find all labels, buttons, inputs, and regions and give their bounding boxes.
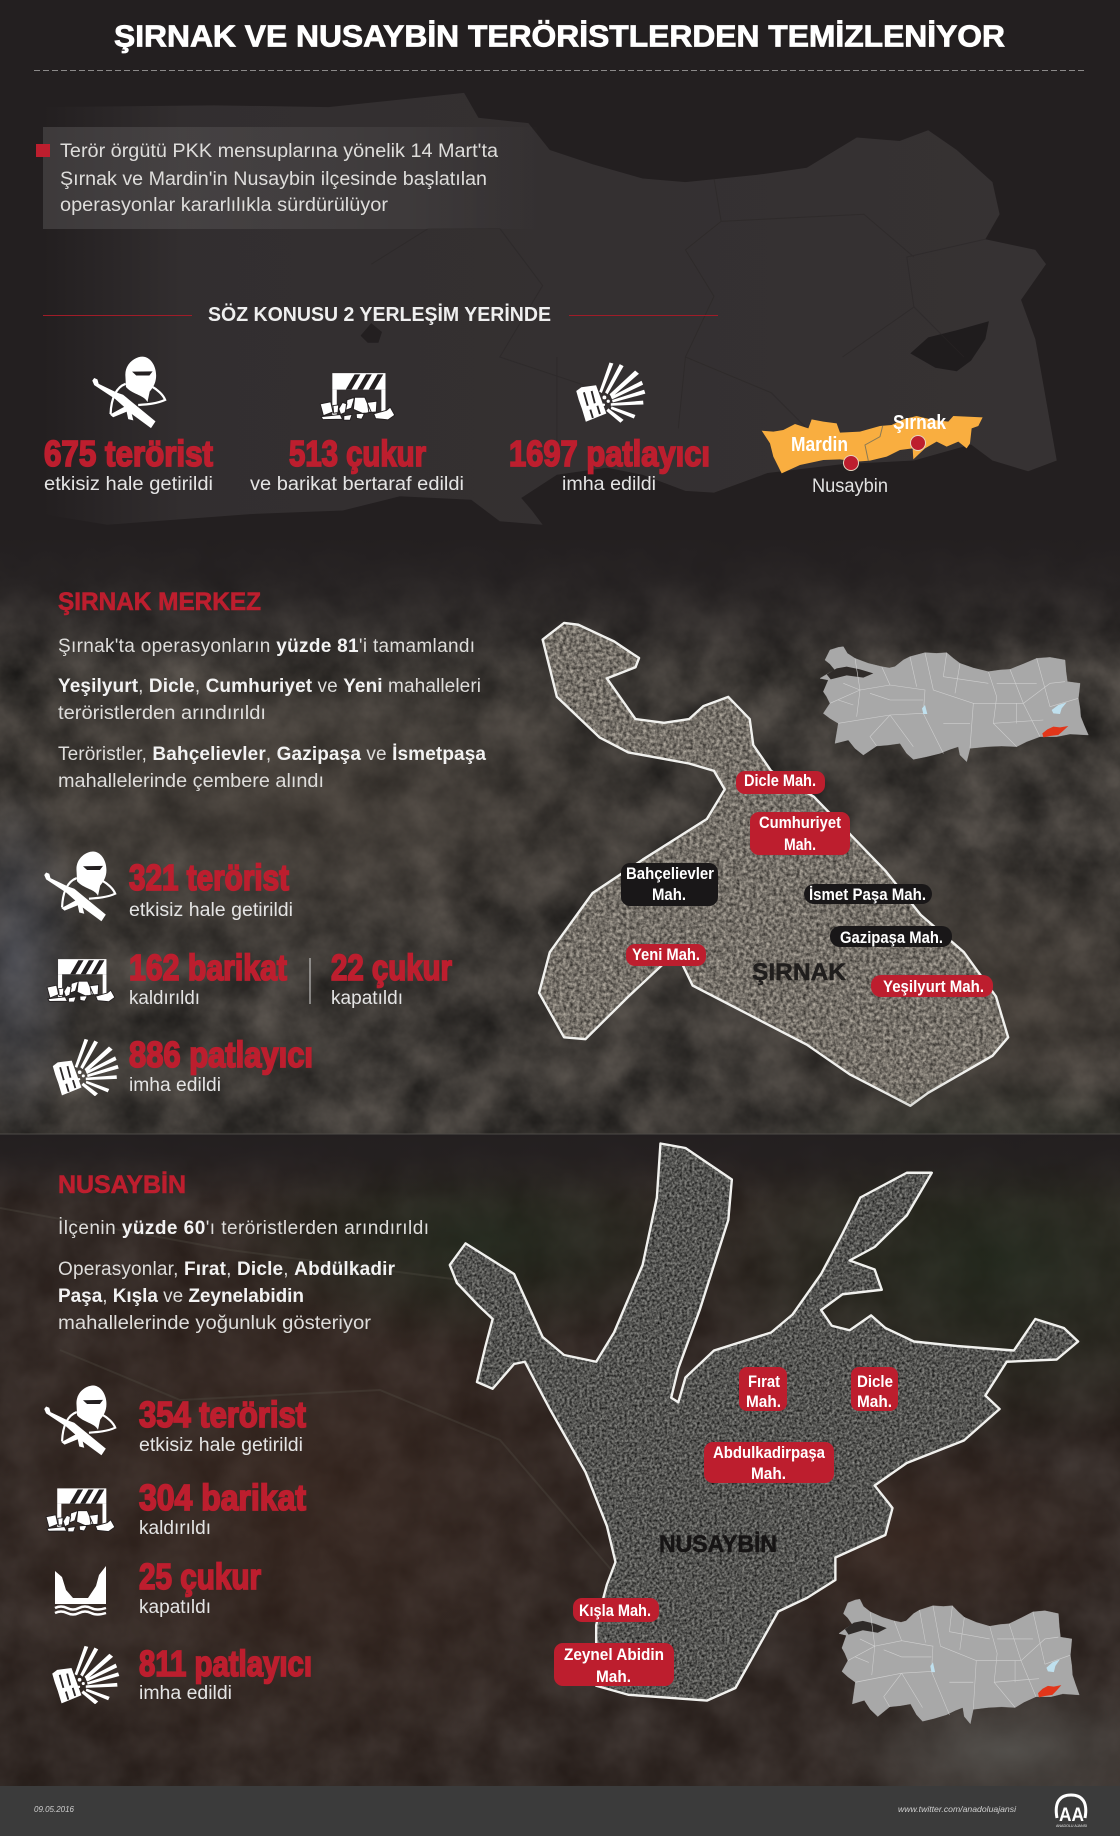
stat: 354 terörist: 354 terörist: [139, 1394, 306, 1435]
stat: 25 çukur: kapatıldı: [139, 1597, 211, 1618]
label: Dicle Mah.: [851, 1367, 898, 1411]
panel: Nusaybin: [0, 1070, 1120, 1830]
stat: 162 barikat: [129, 947, 287, 1009]
locator map: Turkey with Şırnak highlighted: [820, 647, 1088, 762]
date: 09.05.2016: [34, 1804, 74, 1814]
label: Zeynel Abidin Mah.: [554, 1643, 674, 1686]
stat: 811 patlayıcı: imha edildi: [139, 1683, 232, 1704]
label: Gazipaşa Mah.: Gazipaşa Mah.: [840, 928, 943, 947]
stat: 304 barikat: kaldırıldı: [139, 1518, 211, 1539]
label: Kışla Mah.: Kışla Mah.: [579, 1601, 651, 1620]
text block: Şırnak'ta operasyonların yüzde 81'i tamamlandı: [58, 636, 475, 657]
icon: militant: [44, 1386, 115, 1455]
stat: 25 çukur: 25 çukur: [139, 1556, 261, 1597]
stat: 513 çukur: [250, 433, 464, 495]
stat: 22 çukur: 22 çukur: [331, 947, 452, 988]
icon: explosive: [52, 1646, 119, 1704]
text block: teröristlerden arındırıldı: [58, 703, 266, 724]
stat: 513 çukur: ve barikat bertaraf edildi: [250, 474, 464, 495]
icon: filled hole: [55, 1566, 106, 1614]
icon: militant: [44, 852, 115, 921]
heading: NUSAYBİN: [58, 1171, 186, 1199]
label: İsmet Paşa Mah.: İsmet Paşa Mah.: [809, 885, 926, 904]
text block: [58, 1218, 429, 1334]
label: Fırat Mah.: Mah.: [746, 1392, 781, 1411]
stat: 22 çukur: [331, 947, 452, 1009]
stat: 354 terörist: [139, 1394, 306, 1456]
logo: Anadolu Ajansı: AA: [1059, 1805, 1084, 1826]
logo: Anadolu Ajansı: ANADOLU AJANSI: [1056, 1823, 1087, 1828]
text block: Yeşilyurt, Dicle, Cumhuriyet ve Yeni mahalleleri: [58, 676, 481, 697]
stat: 162 barikat: kaldırıldı: [129, 988, 200, 1009]
label: Bahçelievler Mah.: Bahçelievler: [626, 864, 714, 883]
footer bar: [0, 1786, 1120, 1836]
stat: 1697 patlayıcı: 1697 patlayıcı: [509, 433, 710, 474]
intro callout: [36, 127, 543, 229]
label: Fırat Mah.: [739, 1367, 787, 1411]
stat: 513 çukur: 513 çukur: [289, 433, 426, 474]
city label: ŞIRNAK: ŞIRNAK: [752, 959, 847, 986]
label: Dicle Mah.: Mah.: [857, 1392, 892, 1411]
map: Mardin and Şırnak provinces: Şırnak: [893, 412, 947, 434]
stat: 304 barikat: [139, 1477, 306, 1539]
stat: 304 barikat: 304 barikat: [139, 1477, 306, 1518]
locator map: Turkey with Nusaybin highlighted: [839, 1599, 1079, 1724]
stat: 811 patlayıcı: 811 patlayıcı: [139, 1643, 312, 1684]
text block: İlçenin yüzde 60'ı teröristlerden arındırıldı: [58, 1218, 429, 1239]
stat: 886 patlayıcı: [129, 1034, 313, 1096]
intro callout: Terör örgütü PKK mensuplarına yönelik 14 Mart'ta: [60, 141, 498, 162]
text block: Paşa, Kışla ve Zeynelabidin: [58, 1286, 304, 1307]
icon: barricade: [46, 1488, 115, 1532]
stat: 354 terörist: etkisiz hale getirildi: [139, 1435, 303, 1456]
map: Mardin and Şırnak provinces: Mardin: [791, 434, 848, 456]
icon: barricade: [320, 373, 395, 420]
label: Yeni Mah.: Yeni Mah.: [632, 945, 700, 964]
stat: 675 terörist: etkisiz hale getirildi: [44, 474, 213, 495]
text block: mahallelerinde çembere alındı: [58, 771, 324, 792]
label: Abdulkadirpaşa Mah.: Mah.: [751, 1464, 786, 1483]
map: Şırnak city outline: [530, 615, 1010, 1115]
stat: 811 patlayıcı: [139, 1643, 312, 1704]
stat: 675 terörist: [44, 433, 213, 495]
source link: www.twitter.com/anadoluajansi: [898, 1804, 1017, 1814]
text block: [58, 636, 486, 792]
text block: mahallelerinde yoğunluk gösteriyor: [58, 1313, 372, 1334]
stat: 321 terörist: [129, 857, 293, 921]
label: Cumhuriyet Mah.: [750, 812, 850, 855]
label: Abdulkadirpaşa Mah.: Abdulkadirpaşa: [713, 1443, 825, 1462]
stat: 675 terörist: 675 terörist: [44, 433, 213, 474]
subheading: SÖZ KONUSU 2 YERLEŞİM YERİNDE: [208, 303, 551, 326]
map: Mardin and Şırnak provinces: [762, 412, 983, 497]
label: Zeynel Abidin Mah.: Mah.: [596, 1667, 631, 1686]
stat: 1697 patlayıcı: imha edildi: [562, 474, 656, 495]
intro callout: Şırnak ve Mardin'in Nusaybin ilçesinde başlatılan: [60, 169, 487, 190]
label: Dicle Mah.: Dicle: [857, 1372, 893, 1391]
stat: 886 patlayıcı: imha edildi: [129, 1075, 221, 1096]
label: Fırat Mah.: Fırat: [748, 1372, 780, 1391]
label: Dicle Mah.: Dicle Mah.: [744, 771, 816, 790]
text block: Teröristler, Bahçelievler, Gazipaşa ve İsmetpaşa: [58, 744, 486, 765]
label: Yeşilyurt Mah.: Yeşilyurt Mah.: [883, 977, 984, 996]
label: Cumhuriyet Mah.: Mah.: [784, 835, 816, 854]
panel: header and overview background: [0, 0, 1120, 600]
label: Abdulkadirpaşa Mah.: [704, 1442, 834, 1483]
stat: 1697 patlayıcı: [509, 433, 710, 495]
logo: Anadolu Ajansı: [1056, 1795, 1087, 1828]
heading: ŞIRNAK MERKEZ: [58, 588, 261, 616]
icon: barricade: [47, 959, 115, 1002]
icon: explosive: [576, 363, 645, 423]
city label: NUSAYBİN: NUSAYBİN: [659, 1531, 777, 1558]
map: Nusaybin city outline: [440, 1140, 1090, 1720]
label: Bahçelievler Mah.: [621, 863, 718, 906]
stat: 162 barikat: 162 barikat: [129, 947, 287, 988]
intro callout: operasyonlar kararlılıkla sürdürülüyor: [60, 195, 389, 216]
stat: 886 patlayıcı: 886 patlayıcı: [129, 1034, 313, 1075]
stat: 22 çukur: kapatıldı: [331, 988, 403, 1009]
text block: Operasyonlar, Fırat, Dicle, Abdülkadir: [58, 1259, 396, 1280]
label: Bahçelievler Mah.: Mah.: [652, 885, 686, 904]
title: ŞIRNAK VE NUSAYBİN TERÖRİSTLERDEN TEMİZLENİYOR: [114, 18, 1005, 54]
icon: militant: [92, 357, 165, 428]
label: Cumhuriyet Mah.: Cumhuriyet: [759, 813, 841, 832]
map: Mardin and Şırnak provinces: Nusaybin: [812, 476, 888, 497]
stat: 321 terörist: etkisiz hale getirildi: [129, 900, 293, 921]
icon: explosive: [53, 1039, 119, 1096]
map: eastern Turkey silhouette: [43, 93, 1057, 525]
label: Zeynel Abidin Mah.: Zeynel Abidin: [564, 1645, 664, 1664]
stat: 25 çukur: [139, 1556, 261, 1618]
stat: 321 terörist: 321 terörist: [129, 857, 289, 898]
panel: Şırnak Merkez: [0, 581, 1120, 1134]
